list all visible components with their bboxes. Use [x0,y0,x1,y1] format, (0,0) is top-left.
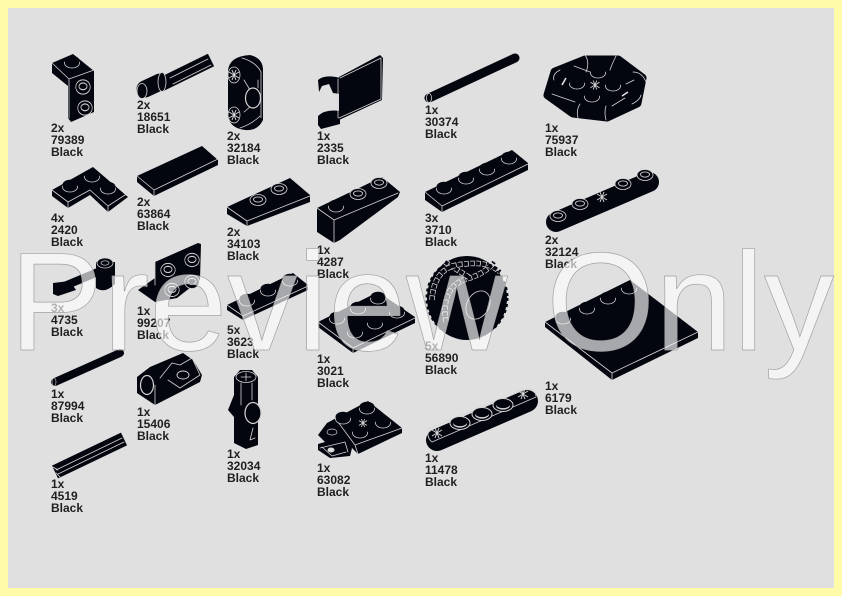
icon: flag [318,55,383,129]
icon: bar [52,353,120,386]
part 11478 [425,389,536,489]
icon: inverted slope [317,177,400,243]
part 3710 [425,150,528,249]
label: 11478 [425,463,458,477]
label: Black [425,235,457,249]
part 3021 [317,292,415,390]
icon: pin axle [137,59,211,98]
label: Black [317,485,349,499]
label: 1x [317,243,331,257]
label: 2x [545,233,559,247]
part 4735 [51,258,115,339]
part 4519 [51,438,124,515]
label: Black [317,153,349,167]
label: 2x [227,129,241,143]
icon: liftarm [428,389,536,442]
label: 2x [51,121,65,135]
label: 99207 [137,316,171,330]
label: 2420 [51,223,78,237]
label: 4519 [51,489,78,503]
label: Black [317,267,349,281]
parts group [51,54,698,515]
icon: octagonal plate [548,55,646,120]
label: 4287 [317,255,344,269]
label: Black [227,347,259,361]
label: 1x [137,405,151,419]
part 34103 [227,178,310,263]
part 2420 [51,167,128,249]
label: Black [137,219,169,233]
icon: tyre [427,256,507,340]
label: 2x [137,98,151,112]
label: Black [545,145,577,159]
label: Black [317,376,349,390]
label: 79389 [51,133,85,147]
label: 2x [227,225,241,239]
label: 1x [317,461,331,475]
label: 63864 [137,207,171,221]
part 75937 [545,55,646,159]
label: 1x [545,121,559,135]
part 32124 [545,170,653,271]
part 30374 [425,58,515,141]
icon: bracket plate [138,243,201,302]
label: 87994 [51,399,85,413]
label: 18651 [137,110,171,124]
part 32034 [227,370,261,485]
label: Black [51,145,83,159]
label: Black [51,411,83,425]
watermark: Preview Only [9,223,834,380]
label: 3x [425,211,439,225]
label: 32034 [227,459,261,473]
label: Black [137,429,169,443]
label: 30374 [425,115,459,129]
icon: plate 1x4 [425,150,528,212]
part 2335 [317,55,383,167]
part 79389 [51,54,94,159]
label: Black [425,475,457,489]
label: Black [51,501,83,515]
label: Black [227,471,259,485]
label: 75937 [545,133,579,147]
part 4287 [317,177,400,281]
part 6179 [545,280,698,417]
label: 5x [227,323,241,337]
icon: axle [53,438,124,477]
label: 1x [425,103,439,117]
label: 1x [227,447,241,461]
part 18651 [137,59,211,136]
label: 63082 [317,473,351,487]
part 87994 [51,353,120,425]
label: 3021 [317,364,344,378]
label: 6179 [545,391,572,405]
label: 1x [51,387,65,401]
label: Black [545,403,577,417]
part 99207 [137,243,201,342]
label: Black [137,328,169,342]
label: 1x [425,451,439,465]
icon: plate 2x3 [318,292,415,353]
icon: clip bar [53,258,115,296]
label: 4735 [51,313,78,327]
label: 1x [317,352,331,366]
icon: connector [228,55,263,130]
label: Black [51,235,83,249]
label: Black [137,122,169,136]
label: 4x [51,211,65,225]
icon: tile [137,146,218,196]
label: 3710 [425,223,452,237]
label: 1x [51,477,65,491]
icon: plate two studs [227,178,310,226]
label: Black [227,249,259,263]
label: 2335 [317,141,344,155]
icon: bracket [52,54,94,122]
part 15406 [137,353,202,443]
label: Black [545,257,577,271]
label: 32124 [545,245,579,259]
icon: rod [426,58,515,102]
label: 15406 [137,417,171,431]
label: 1x [317,129,331,143]
label: 56890 [425,351,459,365]
label: 1x [137,304,151,318]
icon: corner plate [52,167,128,212]
label: Black [227,153,259,167]
label: Black [51,325,83,339]
part 63864 [137,146,218,233]
icon: angle connector [228,370,261,449]
icon: hinge plate [318,401,402,458]
icon: plate 1x3 [227,273,308,320]
part 32184 [227,55,263,167]
label: 3x [51,301,65,315]
label: 34103 [227,237,261,251]
label: 1x [545,379,559,393]
icon: tile with studs [545,280,698,380]
label: 32184 [227,141,261,155]
label: 5x [425,339,439,353]
icon: hinge [137,353,202,405]
part 63082 [317,401,402,499]
label: Black [425,363,457,377]
label: 3623 [227,335,254,349]
label: Black [425,127,457,141]
part 3623 [227,273,308,361]
label: 2x [137,195,151,209]
icon: rounded plate [550,170,653,222]
part 56890 [425,256,507,377]
